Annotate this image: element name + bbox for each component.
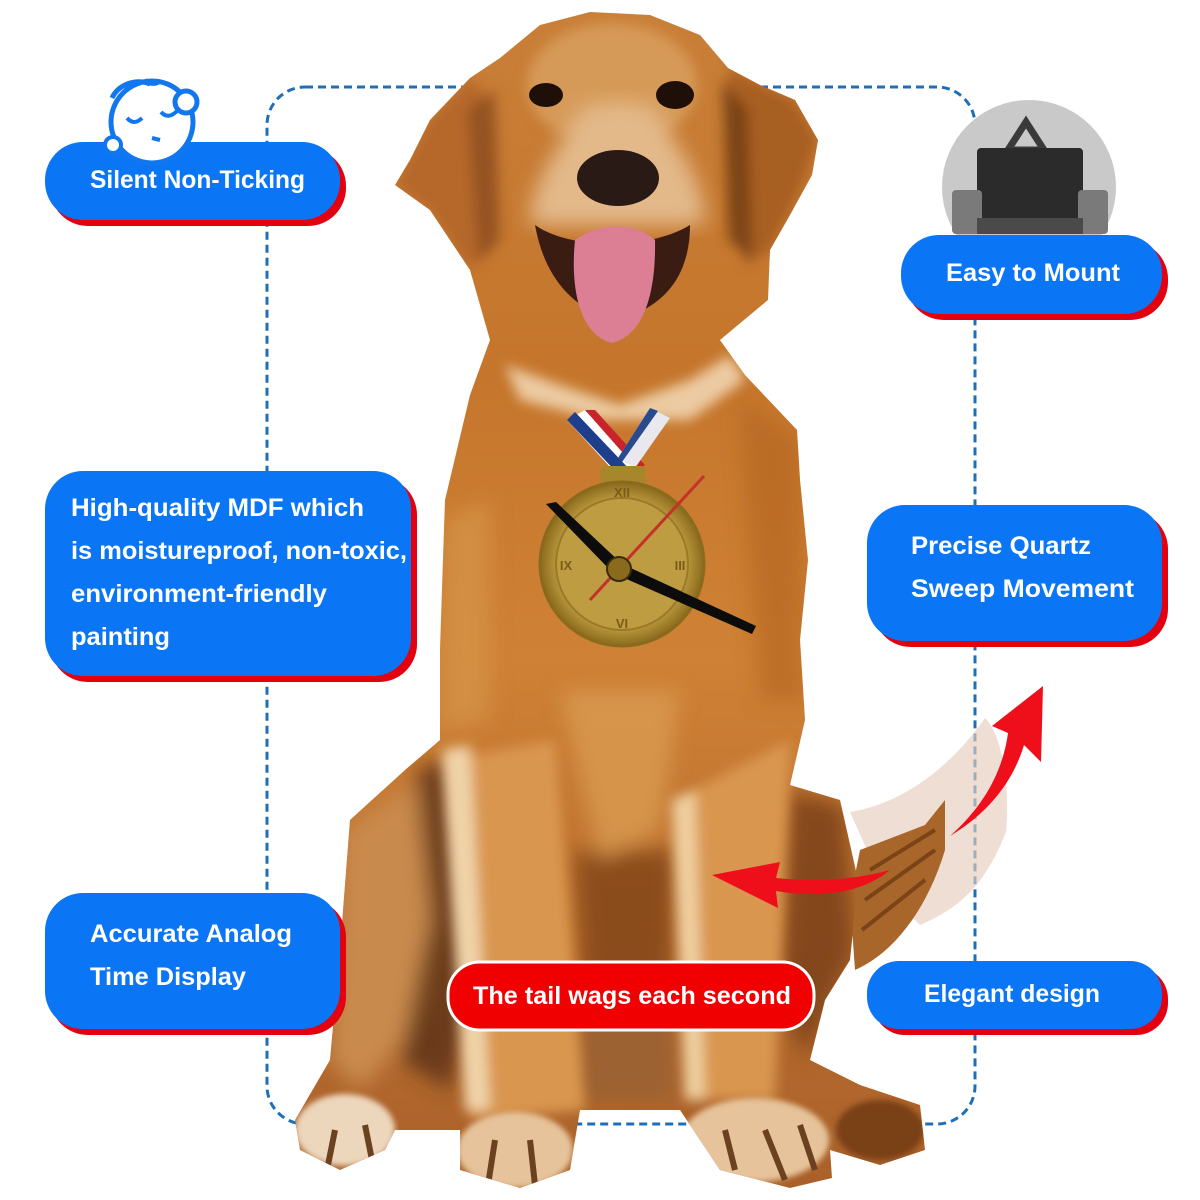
callout: tail wags: The tail wags each second xyxy=(473,982,791,1010)
callout: MDF material: environment-friendly xyxy=(71,580,327,608)
callout: MDF material: is moistureproof, non-toxic, xyxy=(71,537,407,565)
left eye xyxy=(529,83,563,107)
callout: elegant design: Elegant design xyxy=(924,980,1100,1008)
right eye xyxy=(656,81,694,109)
callout: silent non-ticking: Silent Non-Ticking xyxy=(90,166,305,194)
roman numerals: IX xyxy=(560,558,572,573)
sleeping baby icon xyxy=(105,80,197,163)
right ear xyxy=(728,68,818,265)
haunch right xyxy=(780,790,855,1060)
callout: quartz movement: Sweep Movement xyxy=(911,575,1135,603)
paw toes xyxy=(328,1125,815,1185)
dog xyxy=(295,12,925,1188)
callout: analog display: Accurate Analog xyxy=(90,920,292,948)
callout: analog display xyxy=(45,893,346,1035)
callout: easy to mount xyxy=(901,235,1168,320)
faded tail motion xyxy=(850,718,1007,925)
medal clock face xyxy=(540,466,704,646)
callout: quartz movement xyxy=(867,505,1168,647)
roman numerals: VI xyxy=(616,616,628,631)
mouth xyxy=(535,225,690,320)
dashed frame xyxy=(267,87,975,1124)
clock hands xyxy=(546,476,756,634)
callout: analog display: Time Display xyxy=(90,963,246,991)
callout: tail wags xyxy=(448,962,814,1030)
nose xyxy=(577,150,659,206)
roman numerals: XII xyxy=(614,485,630,500)
callout: quartz movement: Precise Quartz xyxy=(911,532,1091,560)
callout: MDF material xyxy=(45,471,417,682)
tail xyxy=(850,800,945,970)
callout: MDF material: High-quality MDF which xyxy=(71,494,364,522)
callout: silent non-ticking xyxy=(45,142,346,226)
arrow: up xyxy=(950,686,1043,836)
chest tuft xyxy=(560,690,680,860)
mounting hardware icon xyxy=(942,100,1116,274)
callout: MDF material: painting xyxy=(71,623,170,651)
roman numerals xyxy=(560,485,685,631)
left ear xyxy=(395,78,495,270)
roman numerals: III xyxy=(675,558,685,573)
left leg xyxy=(445,740,585,1120)
dog shading xyxy=(295,23,924,1188)
arrow: left xyxy=(712,862,890,908)
callout: easy to mount: Easy to Mount xyxy=(946,259,1121,287)
tongue xyxy=(574,226,655,343)
head forehead xyxy=(527,23,697,147)
haunch left xyxy=(330,780,440,1090)
belly gap xyxy=(568,841,678,960)
callout: elegant design xyxy=(867,961,1168,1035)
ruff xyxy=(505,355,745,420)
dog muzzle xyxy=(530,102,705,225)
medal ribbon xyxy=(567,408,670,478)
right leg xyxy=(675,740,790,1100)
dog body silhouette xyxy=(295,12,925,1188)
dog paws xyxy=(295,1094,924,1188)
dark side of the chest xyxy=(740,400,805,700)
